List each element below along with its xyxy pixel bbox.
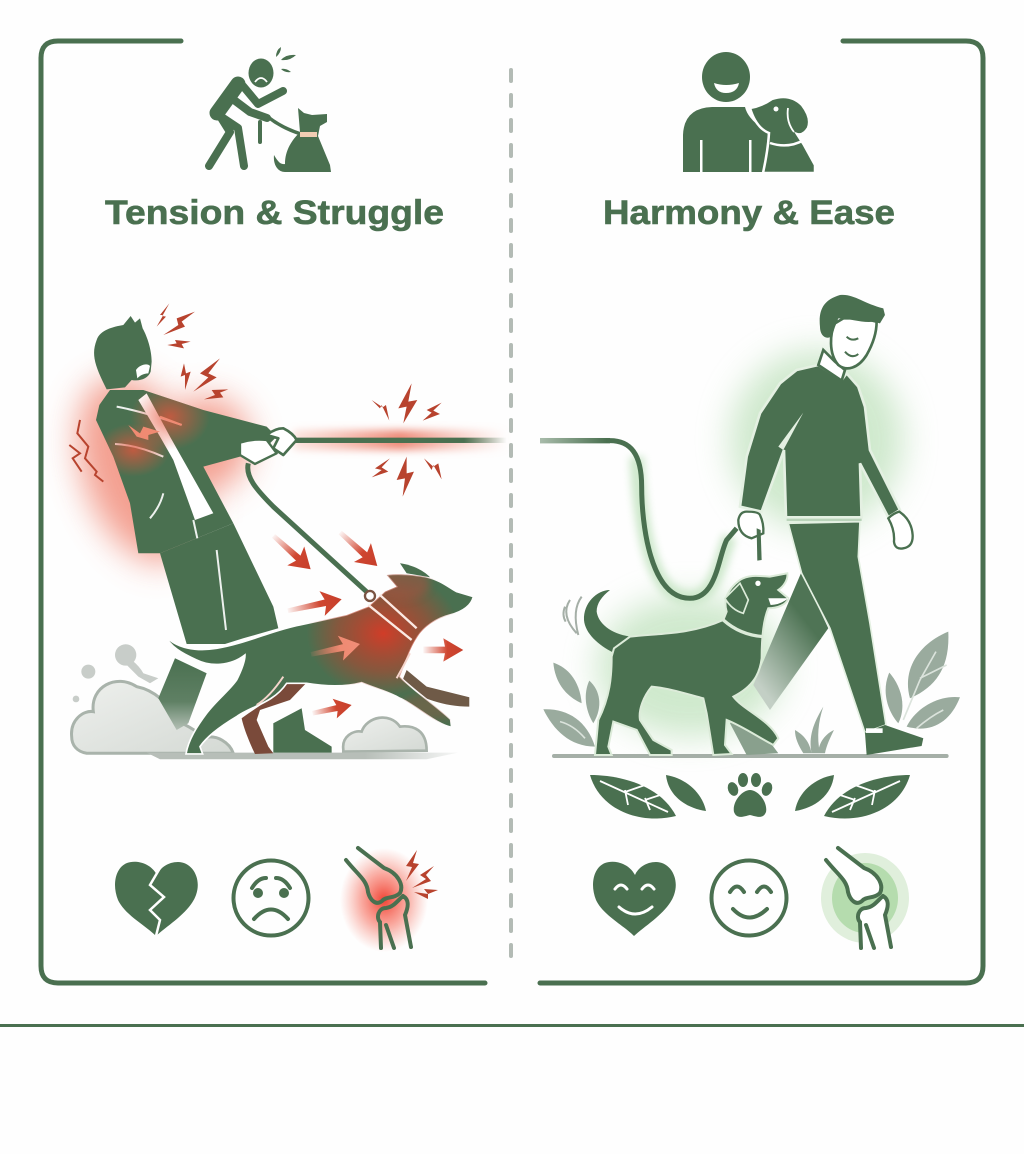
ground line xyxy=(554,750,947,762)
leash under tension xyxy=(248,430,507,593)
icon: happy person with dog xyxy=(683,52,815,173)
green calm glow xyxy=(597,350,903,737)
icon: healthy knee xyxy=(821,848,909,948)
scene: man pulled by straining dog xyxy=(54,303,507,759)
icon: paw print xyxy=(726,773,774,817)
red pain glow behind man xyxy=(54,360,250,580)
icon: happy face xyxy=(712,860,786,936)
force arrows xyxy=(265,523,463,723)
icon: sad face xyxy=(234,860,308,936)
plants xyxy=(543,632,960,753)
dust clouds xyxy=(72,644,427,753)
heading: Tension & Struggle: Tension & Struggle xyxy=(105,194,444,232)
panel: tension and struggle frame xyxy=(41,41,485,983)
panel: harmony and ease frame xyxy=(540,41,983,983)
icon: painful knee xyxy=(340,848,438,952)
pain lightning bolts xyxy=(69,303,442,497)
red strain on torso xyxy=(104,392,207,475)
loose leash xyxy=(540,441,737,598)
calm dog xyxy=(563,573,788,755)
leaf and paw divider: left leaves xyxy=(590,775,706,819)
icon: smiling heart xyxy=(593,862,676,936)
scene: relaxed man walking calm dog xyxy=(540,295,960,756)
icon: stressed person with dog xyxy=(209,47,331,172)
leaf and paw divider: right leaves xyxy=(795,775,910,819)
ground shadow xyxy=(147,753,458,759)
walking man xyxy=(730,295,923,755)
icon: broken heart xyxy=(115,862,198,936)
man leaning back xyxy=(94,316,332,753)
dog lunging forward xyxy=(165,563,473,754)
heading: Harmony & Ease: Harmony & Ease xyxy=(603,194,895,232)
